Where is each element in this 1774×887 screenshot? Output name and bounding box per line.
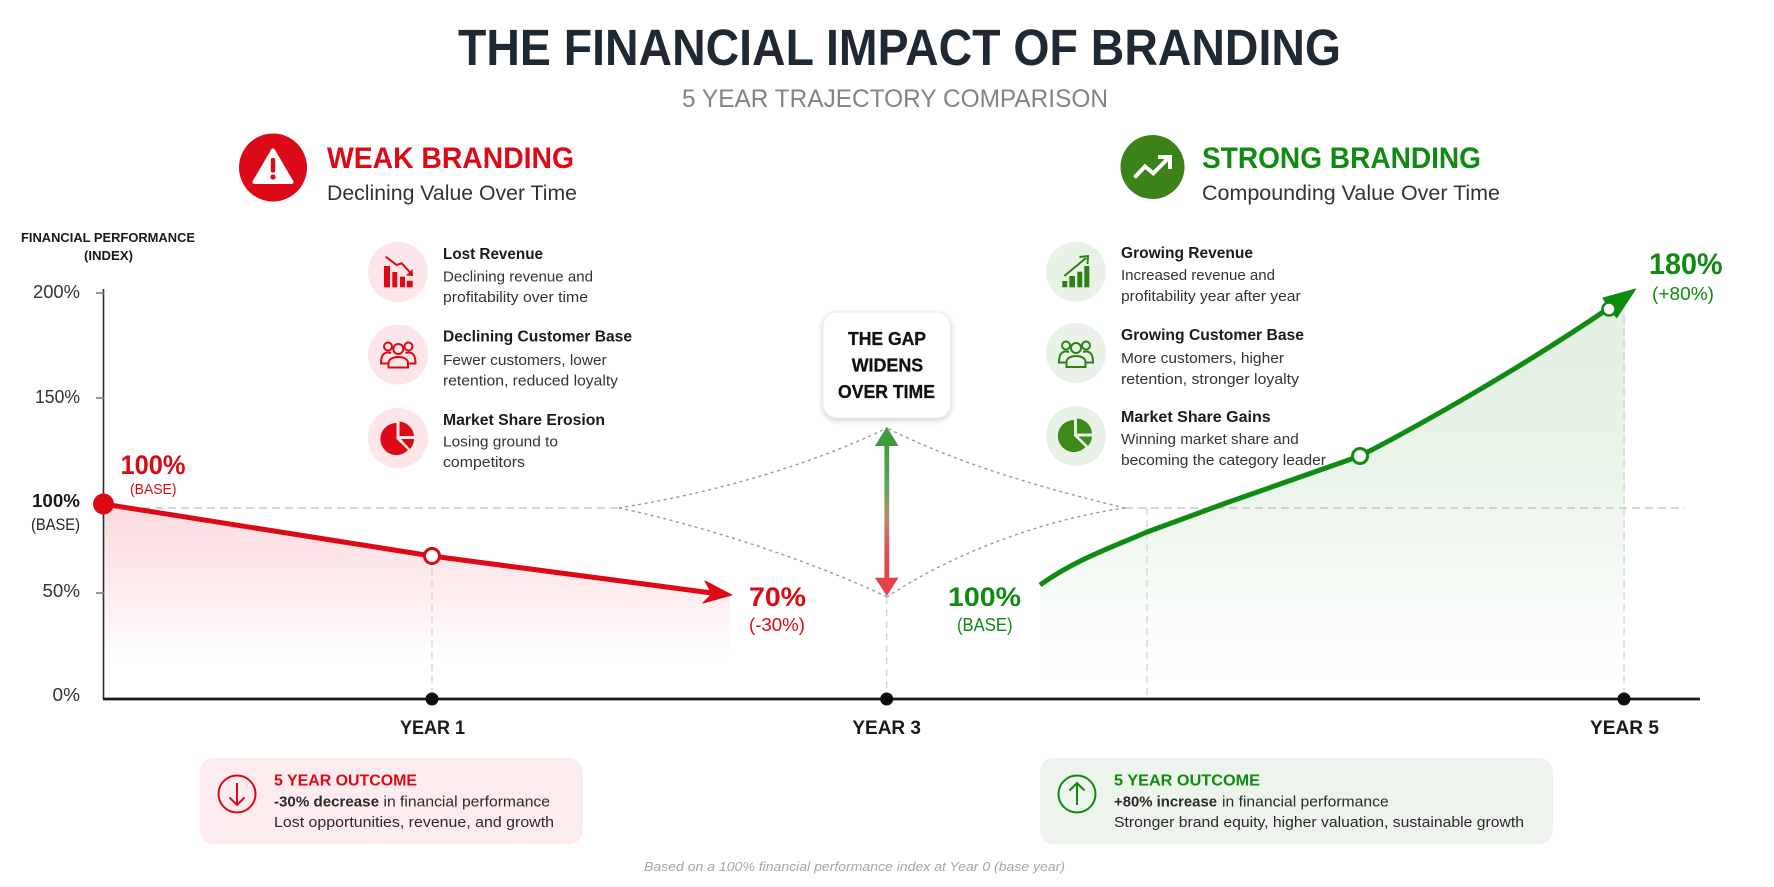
reference line: 100% base bbox=[103, 507, 1685, 509]
y axis title bbox=[21, 230, 195, 263]
label: 70%: (-30%) bbox=[749, 615, 805, 635]
y axis labels: 50% bbox=[42, 580, 80, 601]
panel: weak outcome: Lost opportunities, revenue, and growth bbox=[274, 814, 554, 831]
y axis title: FINANCIAL PERFORMANCE bbox=[21, 230, 195, 245]
year labels: YEAR 5 bbox=[1590, 718, 1659, 739]
label: 180%: 180% bbox=[1649, 248, 1722, 281]
icon: warning bbox=[239, 134, 307, 202]
callout: the gap widens bbox=[823, 312, 950, 418]
panel: strong outcome: in financial performance bbox=[1222, 794, 1389, 811]
year 3 point bbox=[1352, 448, 1368, 464]
item: market share erosion: Losing ground to bbox=[443, 435, 558, 451]
label: red 100% base: (BASE) bbox=[130, 481, 176, 498]
icon: pie chart bbox=[1046, 406, 1106, 466]
icon: trending up bbox=[1120, 135, 1184, 199]
start point bbox=[93, 494, 114, 514]
footnote: Based on a 100% financial performance index at Year 0 (base year) bbox=[644, 859, 1065, 874]
icon: people bbox=[368, 324, 428, 384]
drop lines bbox=[432, 316, 1624, 699]
callout: the gap widens: OVER TIME bbox=[838, 381, 935, 402]
year 1 point bbox=[424, 548, 440, 564]
panel: weak outcome: -30% decrease bbox=[274, 794, 379, 811]
label: 70% bbox=[749, 582, 806, 635]
weak branding trajectory bbox=[93, 494, 732, 603]
arrowhead bbox=[1603, 289, 1636, 318]
subheading: weak branding: Declining Value Over Time bbox=[327, 182, 577, 205]
strong branding trajectory bbox=[1040, 289, 1636, 585]
item: growing revenue: profitability year after year bbox=[1121, 289, 1301, 305]
item: declining customer base: retention, reduced loyalty bbox=[443, 374, 619, 390]
item: market share erosion: Market Share Erosion bbox=[443, 412, 605, 429]
label: 180% bbox=[1649, 248, 1722, 304]
y axis title: (INDEX) bbox=[84, 248, 133, 263]
year labels bbox=[400, 718, 1659, 739]
y axis labels: 200% bbox=[33, 281, 80, 302]
y axis labels: 0% bbox=[52, 684, 80, 705]
item: market share gains bbox=[1046, 406, 1326, 469]
panel: weak outcome: 5 YEAR OUTCOME bbox=[274, 773, 417, 790]
panel: weak outcome: in financial performance bbox=[384, 794, 550, 811]
item: lost revenue bbox=[368, 242, 593, 306]
label: 180%: (+80%) bbox=[1652, 284, 1714, 304]
panel header: strong branding bbox=[1120, 135, 1500, 205]
year markers bbox=[426, 692, 1630, 706]
axes bbox=[96, 289, 1700, 699]
callout: the gap widens: THE GAP bbox=[848, 328, 926, 349]
icon: growing bars bbox=[1046, 242, 1106, 302]
item: market share gains: Market Share Gains bbox=[1121, 409, 1271, 426]
label: 70%: 70% bbox=[749, 582, 806, 612]
label: green 100% base: (BASE) bbox=[957, 615, 1012, 635]
icon: people bbox=[1046, 323, 1106, 383]
item: lost revenue: Declining revenue and bbox=[443, 270, 593, 286]
gap funnel curves bbox=[619, 428, 1125, 597]
item: declining customer base: Declining Customer Base bbox=[443, 329, 632, 346]
item: market share erosion: competitors bbox=[443, 455, 525, 471]
panel: strong outcome: Stronger brand equity, higher valuation, sustainable growth bbox=[1114, 814, 1524, 831]
subtitle: 5 YEAR TRAJECTORY COMPARISON bbox=[682, 85, 1108, 113]
arrowhead bbox=[703, 581, 732, 603]
y axis labels bbox=[31, 281, 80, 705]
item: market share gains: becoming the category leader bbox=[1121, 453, 1326, 469]
year labels: YEAR 1 bbox=[400, 718, 465, 739]
item: growing revenue: Growing Revenue bbox=[1121, 245, 1253, 262]
panel: strong outcome: +80% increase bbox=[1114, 794, 1217, 811]
y axis labels: 150% bbox=[35, 386, 80, 407]
red area fill bbox=[104, 504, 730, 659]
item: growing revenue: Increased revenue and bbox=[1121, 268, 1275, 284]
item: growing customer base: retention, stronger loyalty bbox=[1121, 372, 1300, 388]
item: growing revenue bbox=[1046, 242, 1301, 305]
heading: weak branding: WEAK BRANDING bbox=[327, 142, 574, 175]
panel: strong outcome bbox=[1040, 758, 1553, 844]
year 5 point bbox=[1602, 302, 1616, 316]
callout: the gap widens: WIDENS bbox=[852, 355, 923, 376]
panel: strong outcome: 5 YEAR OUTCOME bbox=[1114, 773, 1260, 790]
icon: down arrow bbox=[218, 776, 256, 812]
item: market share gains: Winning market share and bbox=[1121, 432, 1299, 448]
heading: strong branding: STRONG BRANDING bbox=[1202, 142, 1481, 175]
item: growing customer base: More customers, higher bbox=[1121, 351, 1284, 367]
subheading: strong branding: Compounding Value Over Time bbox=[1202, 182, 1500, 205]
y axis labels: 100% bbox=[32, 490, 80, 511]
item: declining customer base: Fewer customers, lower bbox=[443, 353, 607, 369]
green area fill bbox=[1040, 298, 1625, 685]
title: THE FINANCIAL IMPACT OF BRANDING bbox=[458, 19, 1341, 76]
icon: declining bars bbox=[368, 242, 428, 302]
label: red 100% base bbox=[120, 450, 186, 498]
icon: pie chart bbox=[368, 408, 428, 468]
item: growing customer base: Growing Customer Base bbox=[1121, 327, 1304, 344]
year labels: YEAR 3 bbox=[852, 718, 921, 739]
icon: up arrow bbox=[1058, 776, 1096, 812]
label: red 100% base: 100% bbox=[120, 450, 186, 480]
gap arrow bbox=[875, 427, 898, 596]
item: lost revenue: profitability over time bbox=[443, 290, 588, 306]
y axis labels: (BASE) bbox=[31, 515, 80, 534]
label: green 100% base bbox=[948, 582, 1021, 635]
item: lost revenue: Lost Revenue bbox=[443, 246, 543, 263]
panel: weak outcome bbox=[200, 758, 583, 844]
item: declining customer base bbox=[368, 324, 632, 390]
item: market share erosion bbox=[368, 408, 605, 471]
label: green 100% base: 100% bbox=[948, 582, 1021, 612]
item: growing customer base bbox=[1046, 323, 1304, 388]
panel header: weak branding bbox=[239, 134, 577, 205]
